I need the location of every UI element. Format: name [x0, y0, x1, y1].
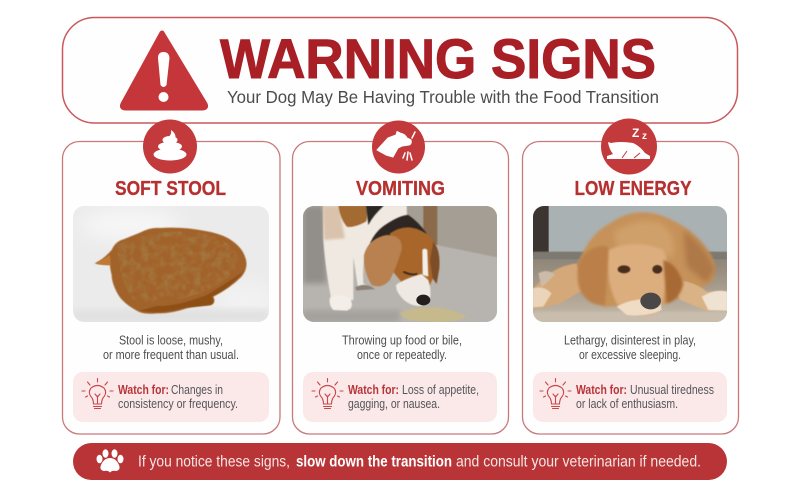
icon: stool	[143, 120, 197, 174]
footer message: slow down the transition	[296, 454, 452, 470]
watch text	[576, 383, 714, 411]
icon: dog vomiting	[372, 120, 425, 174]
watch text: Loss of appetite,	[402, 383, 479, 397]
footer message: If you notice these signs,	[138, 454, 290, 470]
heading: VOMITING	[356, 178, 445, 200]
watch text	[118, 383, 238, 411]
description: or excessive sleeping.	[579, 348, 681, 362]
icon: sleeping dog: z	[642, 131, 647, 142]
icon: light bulb	[312, 378, 343, 408]
watch text: or lack of enthusiasm.	[576, 397, 678, 411]
callout: watch for	[533, 372, 727, 422]
description	[342, 334, 462, 362]
photo: beagle vomiting	[303, 206, 497, 322]
description	[103, 334, 239, 362]
footer message: and consult your veterinarian if needed.	[456, 454, 701, 470]
heading: SOFT STOOL	[115, 178, 226, 200]
description: Lethargy, disinterest in play,	[564, 334, 696, 348]
description: or more frequent than usual.	[103, 348, 239, 362]
icon: light bulb	[82, 378, 113, 408]
panel: header	[62, 18, 738, 123]
watch text: Watch for:	[348, 383, 399, 397]
watch text: Watch for:	[576, 383, 627, 397]
icon: sleeping dog: Z	[632, 126, 639, 140]
photo: soft stool	[73, 206, 275, 322]
description	[564, 334, 696, 362]
watch text: Unusual tiredness	[630, 383, 714, 397]
panel: low energy	[522, 118, 738, 434]
watch text: consistency or frequency.	[118, 397, 238, 411]
icon: warning triangle	[122, 33, 206, 108]
icon: paw	[96, 449, 124, 472]
icon: sleeping dog	[601, 118, 657, 174]
watch text: gagging, or nausea.	[348, 397, 440, 411]
panel: soft stool	[62, 120, 280, 434]
subtitle: Your Dog May Be Having Trouble with the Food Transition	[227, 87, 659, 107]
footer banner	[73, 443, 727, 480]
callout: watch for	[303, 372, 497, 422]
description: Throwing up food or bile,	[342, 334, 462, 348]
watch text: Watch for:	[118, 383, 169, 397]
description: Stool is loose, mushy,	[119, 334, 223, 348]
footer message	[138, 454, 701, 470]
title: WARNING SIGNS	[220, 27, 656, 90]
panel: vomiting	[292, 120, 508, 434]
watch text: Changes in	[171, 383, 223, 397]
icon: light bulb	[540, 378, 571, 408]
photo: tired golden retriever	[533, 206, 727, 322]
watch text	[348, 383, 479, 411]
heading: LOW ENERGY	[574, 178, 692, 200]
callout: watch for	[73, 372, 269, 422]
description: once or repeatedly.	[357, 348, 447, 362]
